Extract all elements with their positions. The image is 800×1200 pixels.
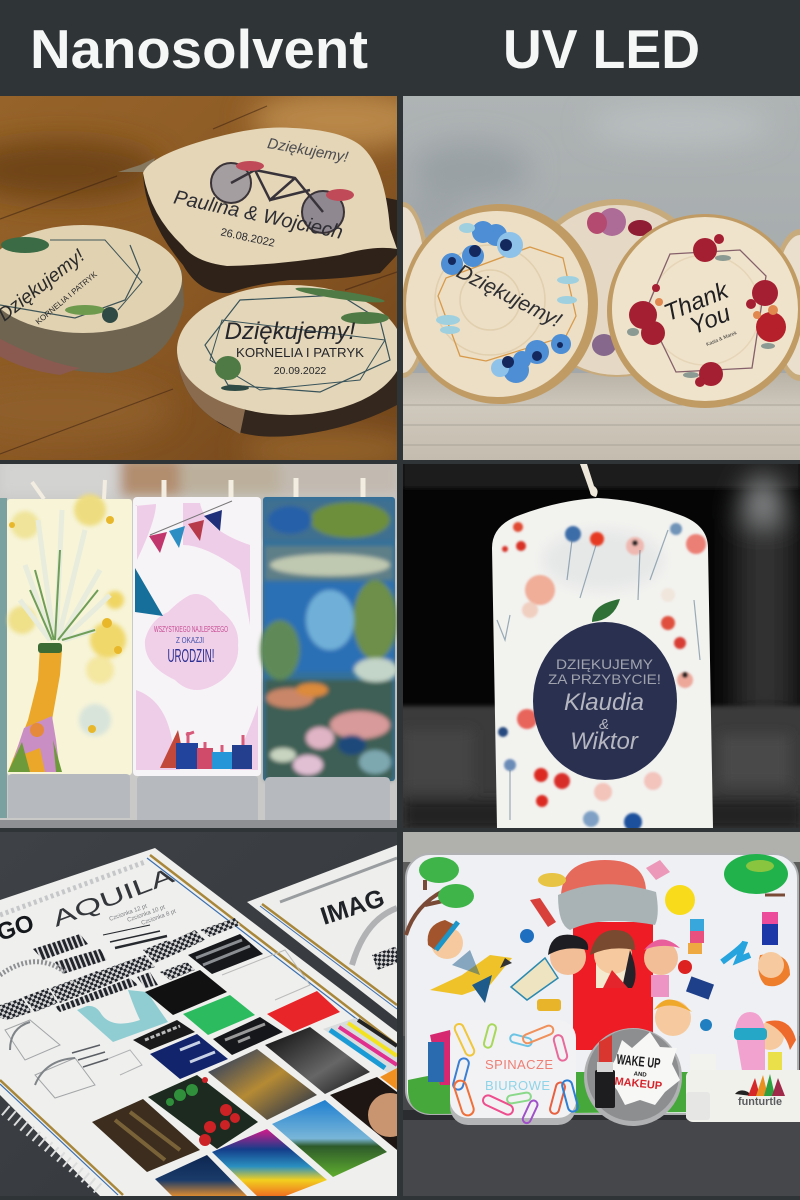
large tin [406, 854, 798, 1114]
logo [735, 1074, 785, 1096]
label: navy circle: DZIĘKUJEMY [556, 656, 654, 672]
slice names: Paulina & Wojciech [172, 186, 345, 244]
panel: printed tins, UV LED [403, 832, 800, 1196]
panel: test print, nanosolvent [0, 832, 412, 1197]
heading: Nanosolvent: Nanosolvent [30, 18, 368, 80]
slice date: 26.08.2022 [219, 226, 276, 250]
teal chart [77, 990, 168, 1042]
wood slice: red flowers: You [686, 300, 734, 340]
main sheet: AQUILA [49, 862, 178, 932]
round tin: makeup [584, 1028, 682, 1126]
small tin: paper clips [450, 1020, 579, 1125]
label: navy circle: Wiktor [570, 728, 639, 755]
wood slice: red flowers [607, 214, 800, 408]
panel: round printed candle, UV LED [395, 458, 800, 846]
round tin: makeup: WAKE UP [616, 1051, 661, 1071]
wood slice: bicycle [118, 127, 397, 293]
small tin: paper clips: BIUROWE [485, 1078, 550, 1093]
round tin: makeup: MAKEUP [614, 1076, 663, 1092]
label: navy circle [533, 622, 677, 780]
panel: printed wood slices, UV LED [375, 96, 800, 461]
icon: gifts [160, 730, 252, 769]
wood slice: wreath left [0, 225, 184, 375]
slice text: Dziękujemy! [453, 260, 565, 332]
wood slice: wreath left: KORNELIA I PATRYK [34, 269, 99, 326]
wood slice: wreath right: 20.09.2022 [274, 365, 326, 377]
cartoon kids [428, 912, 796, 1082]
wood slice: wreath right [177, 285, 403, 437]
line charts [5, 1020, 142, 1098]
panel: printed wood slices, nanosolvent [0, 96, 397, 460]
candle body [492, 464, 713, 831]
paper clips [452, 1022, 579, 1124]
icon: tandem bicycle [211, 161, 354, 233]
candle: birthday: URODZIN! [168, 646, 214, 666]
wood slice: red flowers: Kasia & Marek [705, 330, 738, 348]
panel: flat printed candles, nanosolvent [0, 458, 400, 828]
sheet small text: Czcionka 8 pt [141, 909, 177, 927]
print swatches [92, 934, 412, 1197]
small tin: paper clips: SPINACZE [485, 1057, 553, 1072]
slice greeting: Dziękujemy! [266, 135, 350, 166]
sheet small text [109, 904, 176, 924]
background slices [375, 199, 800, 381]
icon: green leaf [592, 599, 620, 622]
label: navy circle: Klaudia [564, 689, 644, 716]
sheet small text: Czcionka 12 pt [109, 904, 148, 923]
main sheet [0, 848, 412, 1197]
candle: champagne [7, 480, 132, 775]
candle: birthday: Z OKAZJI [176, 636, 204, 645]
candle stands [8, 774, 390, 823]
slice text: Dziękujemy! [225, 318, 356, 345]
grass [408, 1072, 688, 1114]
round tin: makeup: AND [633, 1071, 648, 1079]
second sheet: IMAG [317, 884, 388, 931]
barcodes and QR codes [0, 918, 240, 1020]
lighter: funturtle: funturtle [738, 1096, 782, 1108]
lighter: funturtle [686, 1054, 800, 1122]
wood slice: wreath right: KORNELIA I PATRYK [236, 346, 365, 360]
label: navy circle: ZA PRZYBYCIE! [548, 671, 661, 687]
candle text: WSZYSTKIEGO NAJLEPSZEGO [154, 625, 228, 634]
candle: birthday [133, 480, 261, 776]
icon: trees [406, 854, 788, 935]
red tower [558, 860, 658, 1050]
slice text: Thank [660, 276, 734, 327]
second sheet [247, 845, 401, 1019]
heading: UV LED: UV LED [503, 18, 700, 80]
wood slice: blue flowers [402, 204, 598, 404]
icon: lipstick [595, 1035, 615, 1108]
candle: water lilies [260, 478, 398, 781]
sheet small text: Czcionka 10 pt [127, 905, 166, 924]
label: navy circle: & [599, 716, 609, 733]
decorations [428, 860, 767, 1088]
